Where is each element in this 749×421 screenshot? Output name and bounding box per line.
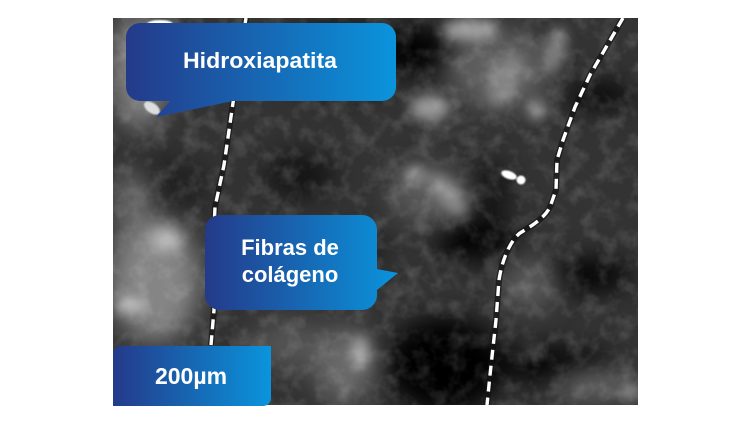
callout: Hidroxiapatita [126,23,396,117]
hydroxyapatite deposit highlights [142,20,525,184]
tissue texture [113,18,638,405]
scale label: 200µm [113,346,271,406]
microscopy photograph [110,10,640,413]
scale value: 200µm [155,363,227,389]
callout: Fibras de colágeno [205,215,398,310]
dashed boundary line: right [487,18,623,405]
label: Fibras de colágeno: Fibras de [241,235,339,260]
label: Fibras de colágeno: colágeno [242,262,338,287]
collagen fibre streaks [387,119,476,297]
dark tissue regions [130,20,636,413]
bright tissue regions [110,10,635,403]
dashed boundary line: left [211,18,246,345]
label: Hidroxiapatita: Hidroxiapatita [183,48,338,73]
